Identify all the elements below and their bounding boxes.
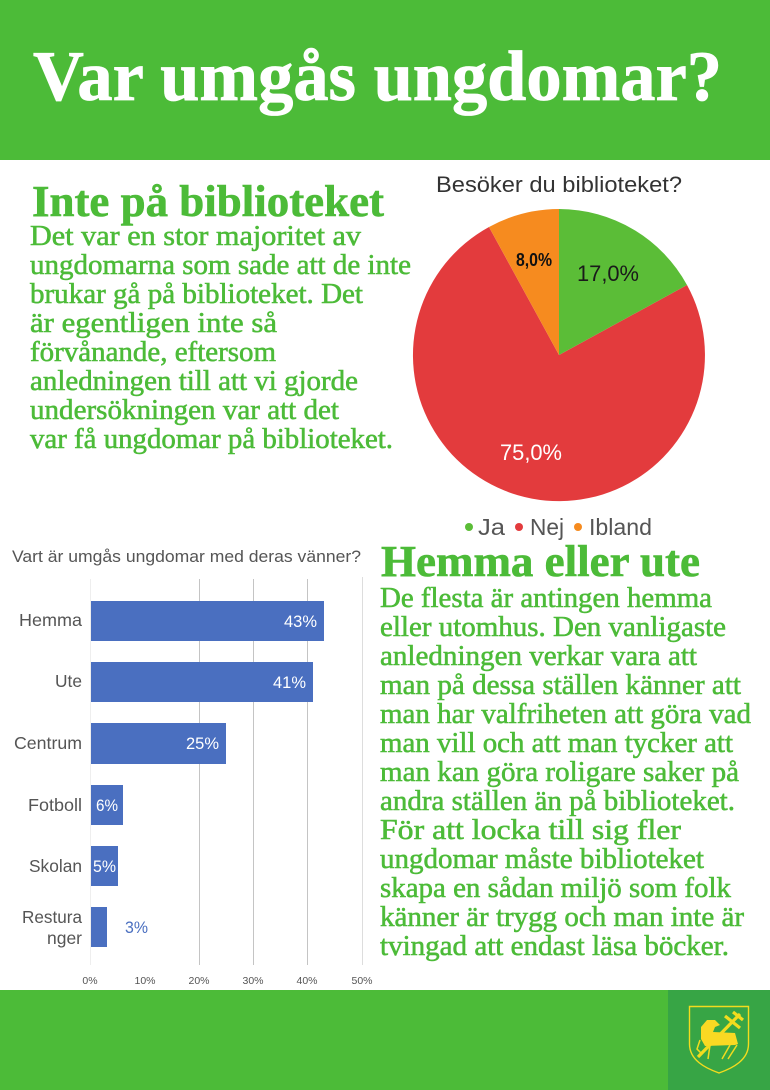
lamb [701,1020,738,1046]
x axis labels: 20% [188,975,210,987]
bar: Hemma 43% [19,601,324,641]
bar: Centrum 25%: 25% [186,734,219,753]
bar: Hemma 43%: 43% [284,612,317,631]
bar: Ute 41% [55,662,313,702]
text block: library paragraph: Det var en stor majoritet av [30,221,361,252]
text block: home or outdoors paragraph: För att locka till sig fler [380,815,682,846]
heading: Inte på biblioteket: Inte på biblioteket [32,177,384,226]
pie slice: Ibland 8% [489,209,559,355]
text block: library paragraph: förvånande, eftersom [30,337,276,368]
bar: Resturanger 3% [22,907,148,948]
x axis labels: 30% [242,975,264,987]
text block: home or outdoors paragraph: tvingad att endast läsa böcker. [380,931,729,962]
text block: home or outdoors paragraph: man på dessa ställen känner att [380,670,741,701]
text block: home or outdoors paragraph: De flesta är antingen hemma [380,583,713,614]
text block: home or outdoors paragraph: man har valfriheten att göra vad [380,699,751,730]
header banner [0,0,770,160]
text block: library paragraph: är egentligen inte så [30,308,278,339]
bar: Hemma 43%: Hemma [19,610,82,630]
pie slice: Nej 75% [413,227,705,501]
text block: home or outdoors paragraph: anledningen verkar vara att [380,641,697,672]
text block: library paragraph [30,221,411,455]
text block: library paragraph: undersökningen var att det [30,395,339,426]
pie chart: Besöker du biblioteket? [413,172,705,540]
pie slice: Ja 17% [559,209,687,355]
x axis labels: 10% [134,975,156,987]
bar: Fotboll 6%: 6% [96,796,118,815]
x axis labels [82,975,373,987]
text block: library paragraph: var få ungdomar på biblioteket. [30,424,393,455]
pie legend: Ja [478,514,505,540]
text block: home or outdoors paragraph: skapa en sådan miljö som folk [380,873,731,904]
cross [698,1012,743,1057]
pie legend: Nej [530,514,564,540]
text block: home or outdoors paragraph: man kan göra roligare saker på [380,757,740,788]
bar: Centrum 25%: Centrum [14,733,82,753]
x axis labels: 40% [296,975,318,987]
x axis labels: 0% [82,975,98,987]
text block: home or outdoors paragraph: eller utomhus. Den vanligaste [380,612,726,643]
x axis labels: 50% [351,975,373,987]
label: 8,0%: 8,0% [516,250,552,270]
bar: Resturanger 3%: Restura [22,907,82,927]
bar: Ute 41%: Ute [55,671,82,691]
pie chart title: Besöker du biblioteket? [436,172,682,197]
text block: home or outdoors paragraph: ungdomar måste biblioteket [380,844,704,875]
text block: home or outdoors paragraph: känner är trygg och man inte är [380,902,745,933]
bar: Skolan 5% [29,846,118,886]
text block: library paragraph: brukar gå på biblioteket. Det [30,279,363,310]
bar: Fotboll 6%: Fotboll [28,795,82,815]
bar chart: Vart är umgås ungdomar med deras vänner? [12,547,373,987]
shield outline [690,1006,748,1073]
bar: Fotboll 6% [28,785,123,825]
bar: Ute 41%: 41% [273,673,306,692]
bar: Skolan 5%: Skolan [29,856,82,876]
text block: library paragraph: anledningen till att vi gjorde [30,366,358,397]
bar: Resturanger 3%: 3% [125,918,148,937]
title: Var umgås ungdomar? [33,38,722,116]
pie legend [465,514,652,540]
label: 75,0%: 75,0% [500,440,562,465]
logo: coat of arms on dark green square [668,990,770,1090]
text block: home or outdoors paragraph [380,583,751,962]
text block: library paragraph: ungdomarna som sade att de inte [30,250,411,281]
bar: Skolan 5%: 5% [93,857,116,876]
bar: Resturanger 3%: nger [47,928,82,948]
pie legend: Ibland [589,514,652,540]
text block: home or outdoors paragraph: man vill och att man tycker att [380,728,733,759]
label: 17,0%: 17,0% [577,261,639,286]
text block: home or outdoors paragraph: andra ställen än på biblioteket. [380,786,735,817]
footer banner [0,990,770,1090]
bar chart title: Vart är umgås ungdomar med deras vänner? [12,547,361,566]
bar: Centrum 25% [14,723,226,764]
heading: Hemma eller ute: Hemma eller ute [381,537,700,586]
